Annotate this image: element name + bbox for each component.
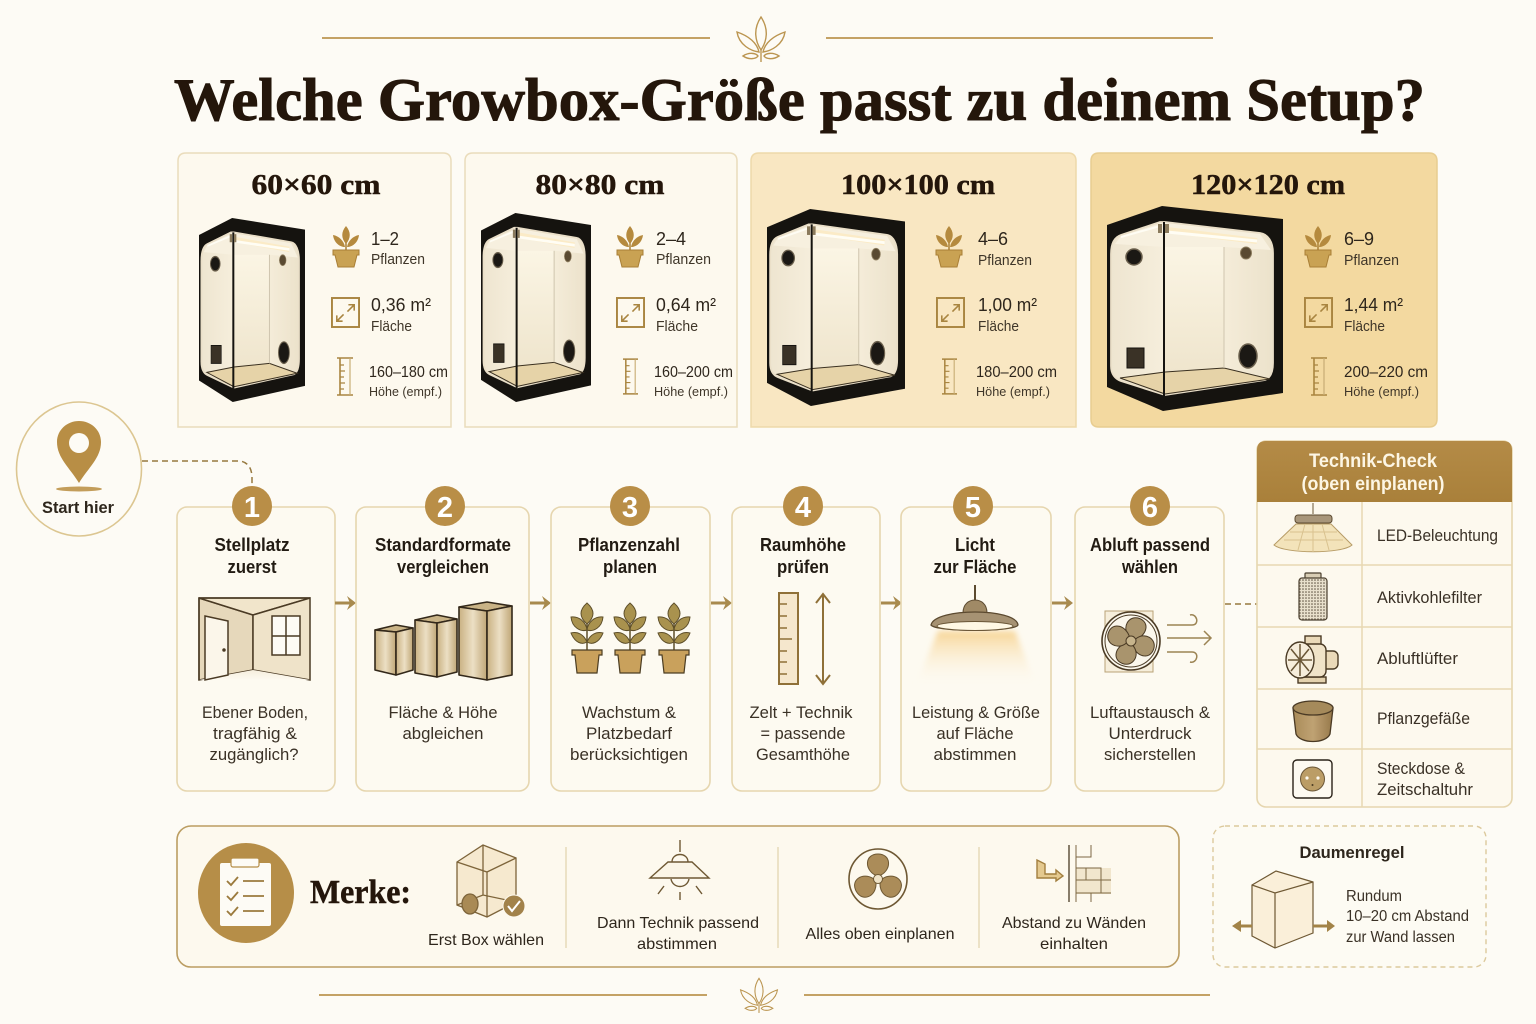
icon: round fan (849, 849, 907, 909)
header text: Technik-Check (1309, 451, 1437, 472)
icon: carbon filter (1299, 573, 1327, 620)
panel: 60x60 cm (178, 153, 451, 427)
arrow 1 to 2 (335, 596, 356, 610)
step text (388, 703, 498, 743)
step heading: Raumhöhe (760, 535, 846, 555)
step text (912, 703, 1040, 764)
icon: lamp with light (916, 585, 1036, 686)
tent: 80x80 (481, 213, 591, 402)
header (1257, 441, 1512, 502)
height label: Höhe (empf.) (369, 384, 442, 399)
plants label: Pflanzen (978, 253, 1032, 269)
step text: Unterdruck (1108, 724, 1192, 743)
height label: Höhe (empf.) (654, 384, 728, 399)
area label: Fläche (371, 319, 412, 335)
start marker (16, 402, 142, 536)
icon: ruler (942, 359, 957, 394)
step text: auf Fläche (936, 724, 1014, 743)
step heading: Standardformate (375, 535, 511, 555)
icon: pendant lamp (650, 840, 709, 900)
label: fan: Alles oben einplanen (806, 926, 954, 943)
dashed connector: step 6 to technik check (1225, 603, 1257, 605)
plants value: 2–4 (656, 228, 686, 249)
label: box: Erst Box wählen (428, 932, 544, 949)
number 2: 2 (437, 492, 453, 524)
number 5: 5 (965, 492, 981, 524)
step heading (934, 535, 1016, 577)
icon: ruler (623, 359, 638, 394)
step text: = passende (760, 724, 846, 743)
tent: 120x120 (1107, 206, 1283, 411)
icon: area (937, 298, 964, 327)
step text: Luftaustausch & (1090, 703, 1211, 722)
icon: room (199, 598, 310, 680)
panel: step 4 (732, 486, 880, 791)
step heading: Licht (955, 535, 995, 555)
step text: berücksichtigen (570, 745, 688, 764)
step heading (214, 535, 290, 577)
step number 3 (610, 486, 650, 526)
panel: 80x80 cm (465, 153, 737, 427)
label: filter: Aktivkohlefilter (1377, 589, 1482, 607)
panel: step 5 (901, 486, 1051, 791)
icon: area (332, 298, 359, 327)
step text (202, 703, 308, 764)
label: lamp: abstimmen (637, 936, 717, 953)
step text: sicherstellen (1104, 745, 1196, 764)
panel: 120x120 cm (1091, 153, 1437, 427)
icon: socket (1293, 760, 1332, 798)
height label: Höhe (empf.) (1344, 384, 1419, 399)
step number 6 (1130, 486, 1170, 526)
step text: Leistung & Größe (912, 703, 1040, 722)
label: lamp: Dann Technik passend (597, 915, 759, 932)
icon: ruler (337, 358, 353, 395)
icon: area (617, 298, 644, 327)
step heading: zur Fläche (934, 557, 1016, 577)
rule text (1346, 888, 1469, 946)
label: wall (1002, 915, 1146, 953)
tent: 100x100 (767, 209, 905, 406)
header text (1302, 451, 1444, 495)
step text: abstimmen (934, 745, 1016, 764)
area value: 0,64 m² (656, 294, 716, 315)
step text: zugänglich? (210, 745, 298, 764)
step text: Wachstum & (582, 703, 677, 722)
panel: Technik-Check (1257, 441, 1512, 807)
step text: Fläche & Höhe (388, 703, 498, 722)
height value: 180–200 cm (976, 364, 1057, 381)
step text: Platzbedarf (586, 724, 672, 743)
icon: plant (1305, 226, 1331, 267)
label: LED: LED-Beleuchtung (1377, 527, 1498, 545)
height value: 160–180 cm (369, 364, 448, 381)
step number 5 (953, 486, 993, 526)
icon: three plants (571, 603, 690, 673)
bottom ornament (319, 978, 1210, 1013)
step heading (1090, 535, 1210, 577)
area label: Fläche (1344, 319, 1385, 335)
area value: 1,00 m² (978, 294, 1037, 315)
title: Welche Growbox-Größe passt zu deinem Setup? (174, 67, 1425, 133)
height label: Höhe (empf.) (976, 384, 1050, 399)
plants label: Pflanzen (656, 252, 711, 268)
step text: abgleichen (402, 724, 484, 743)
icon: plant (617, 226, 643, 267)
number 6: 6 (1142, 492, 1158, 524)
step heading: Abluft passend (1090, 535, 1210, 555)
step heading: zuerst (228, 557, 277, 577)
panel: step 3 (551, 486, 710, 791)
icon: ruler (1311, 358, 1327, 395)
arrow 2 to 3 (530, 596, 551, 610)
step text (570, 703, 688, 764)
icon: clipboard (198, 843, 294, 943)
height value: 160–200 cm (654, 364, 733, 381)
panel: Daumenregel (1213, 826, 1486, 967)
heading: 120x120: 120×120 cm (1191, 169, 1345, 201)
plants value: 6–9 (1344, 228, 1374, 249)
step heading: Pflanzenzahl (578, 535, 680, 555)
height value: 200–220 cm (1344, 364, 1428, 381)
label: socket: Steckdose & (1377, 760, 1465, 778)
heading: 80x80: 80×80 cm (536, 169, 664, 201)
rule text: Rundum (1346, 888, 1402, 905)
label: wall: Abstand zu Wänden (1002, 915, 1146, 932)
step heading: planen (603, 557, 657, 577)
label: fan: Abluftlüfter (1377, 650, 1459, 668)
area label: Fläche (656, 319, 698, 335)
label: socket: Zeitschaltuhr (1377, 781, 1474, 799)
step text (1090, 703, 1211, 764)
number 1: 1 (244, 492, 260, 524)
icon: box with arrows (1232, 871, 1335, 948)
panel: 100x100 cm (751, 153, 1076, 427)
label: socket (1377, 760, 1474, 799)
step text: Zelt + Technik (750, 703, 853, 722)
step number 4 (783, 486, 823, 526)
step text (750, 703, 853, 764)
area value: 1,44 m² (1344, 294, 1403, 315)
area value: 0,36 m² (371, 294, 431, 315)
step heading: prüfen (777, 557, 829, 577)
number 3: 3 (622, 492, 638, 524)
area label: Fläche (978, 319, 1019, 335)
panel: step 6 (1075, 486, 1224, 791)
plants value: 4–6 (978, 228, 1008, 249)
step text: tragfähig & (213, 724, 298, 743)
rule text: 10–20 cm Abstand (1346, 908, 1469, 925)
heading: Daumenregel: Daumenregel (1300, 843, 1404, 862)
icon: LED light (1274, 503, 1352, 552)
icon: three boxes (375, 602, 512, 680)
arrow 5 to 6 (1052, 596, 1073, 610)
step heading (375, 535, 511, 577)
heading: 100x100: 100×100 cm (841, 169, 995, 201)
arrow 3 to 4 (711, 596, 732, 610)
heading: 60x60: 60×60 cm (252, 169, 380, 201)
rule text: zur Wand lassen (1346, 929, 1455, 946)
icon: exhaust fan (1102, 611, 1211, 672)
start label: Start hier (42, 499, 115, 517)
dashed connector: start to step 1 (142, 461, 252, 486)
icon: fabric pot (1293, 701, 1333, 742)
panel: step 1 (177, 486, 335, 791)
icon: area (1305, 298, 1332, 327)
panel: step 2 (356, 486, 529, 791)
step heading: wählen (1121, 557, 1178, 577)
step number 1 (232, 486, 272, 526)
arrow 4 to 5 (881, 596, 902, 610)
icon: map pin (57, 421, 101, 483)
panel: Merke (177, 826, 1179, 967)
label: wall: einhalten (1040, 936, 1108, 953)
step text: Gesamthöhe (756, 745, 850, 764)
step text: Ebener Boden, (202, 703, 308, 722)
step heading: Stellplatz (214, 535, 290, 555)
step number 2 (425, 486, 465, 526)
icon: ruler and height arrow (779, 593, 830, 684)
icon: plant (936, 226, 962, 267)
icon: box with check (457, 845, 525, 917)
step heading (578, 535, 680, 577)
number 4: 4 (795, 492, 811, 524)
plants value: 1–2 (371, 228, 399, 249)
heading: Merke: Merke: (310, 874, 411, 911)
step heading (760, 535, 846, 577)
plants label: Pflanzen (371, 252, 425, 268)
plants label: Pflanzen (1344, 253, 1399, 269)
header text: (oben einplanen) (1302, 474, 1444, 495)
icon: plant (333, 226, 359, 267)
step heading: vergleichen (397, 557, 489, 577)
label: lamp (597, 915, 759, 953)
tent: 60x60 (199, 218, 305, 402)
top ornament (322, 17, 1213, 62)
icon: wall distance (1037, 845, 1111, 902)
label: pot: Pflanzgefäße (1377, 710, 1470, 728)
icon: inline fan (1286, 636, 1338, 683)
